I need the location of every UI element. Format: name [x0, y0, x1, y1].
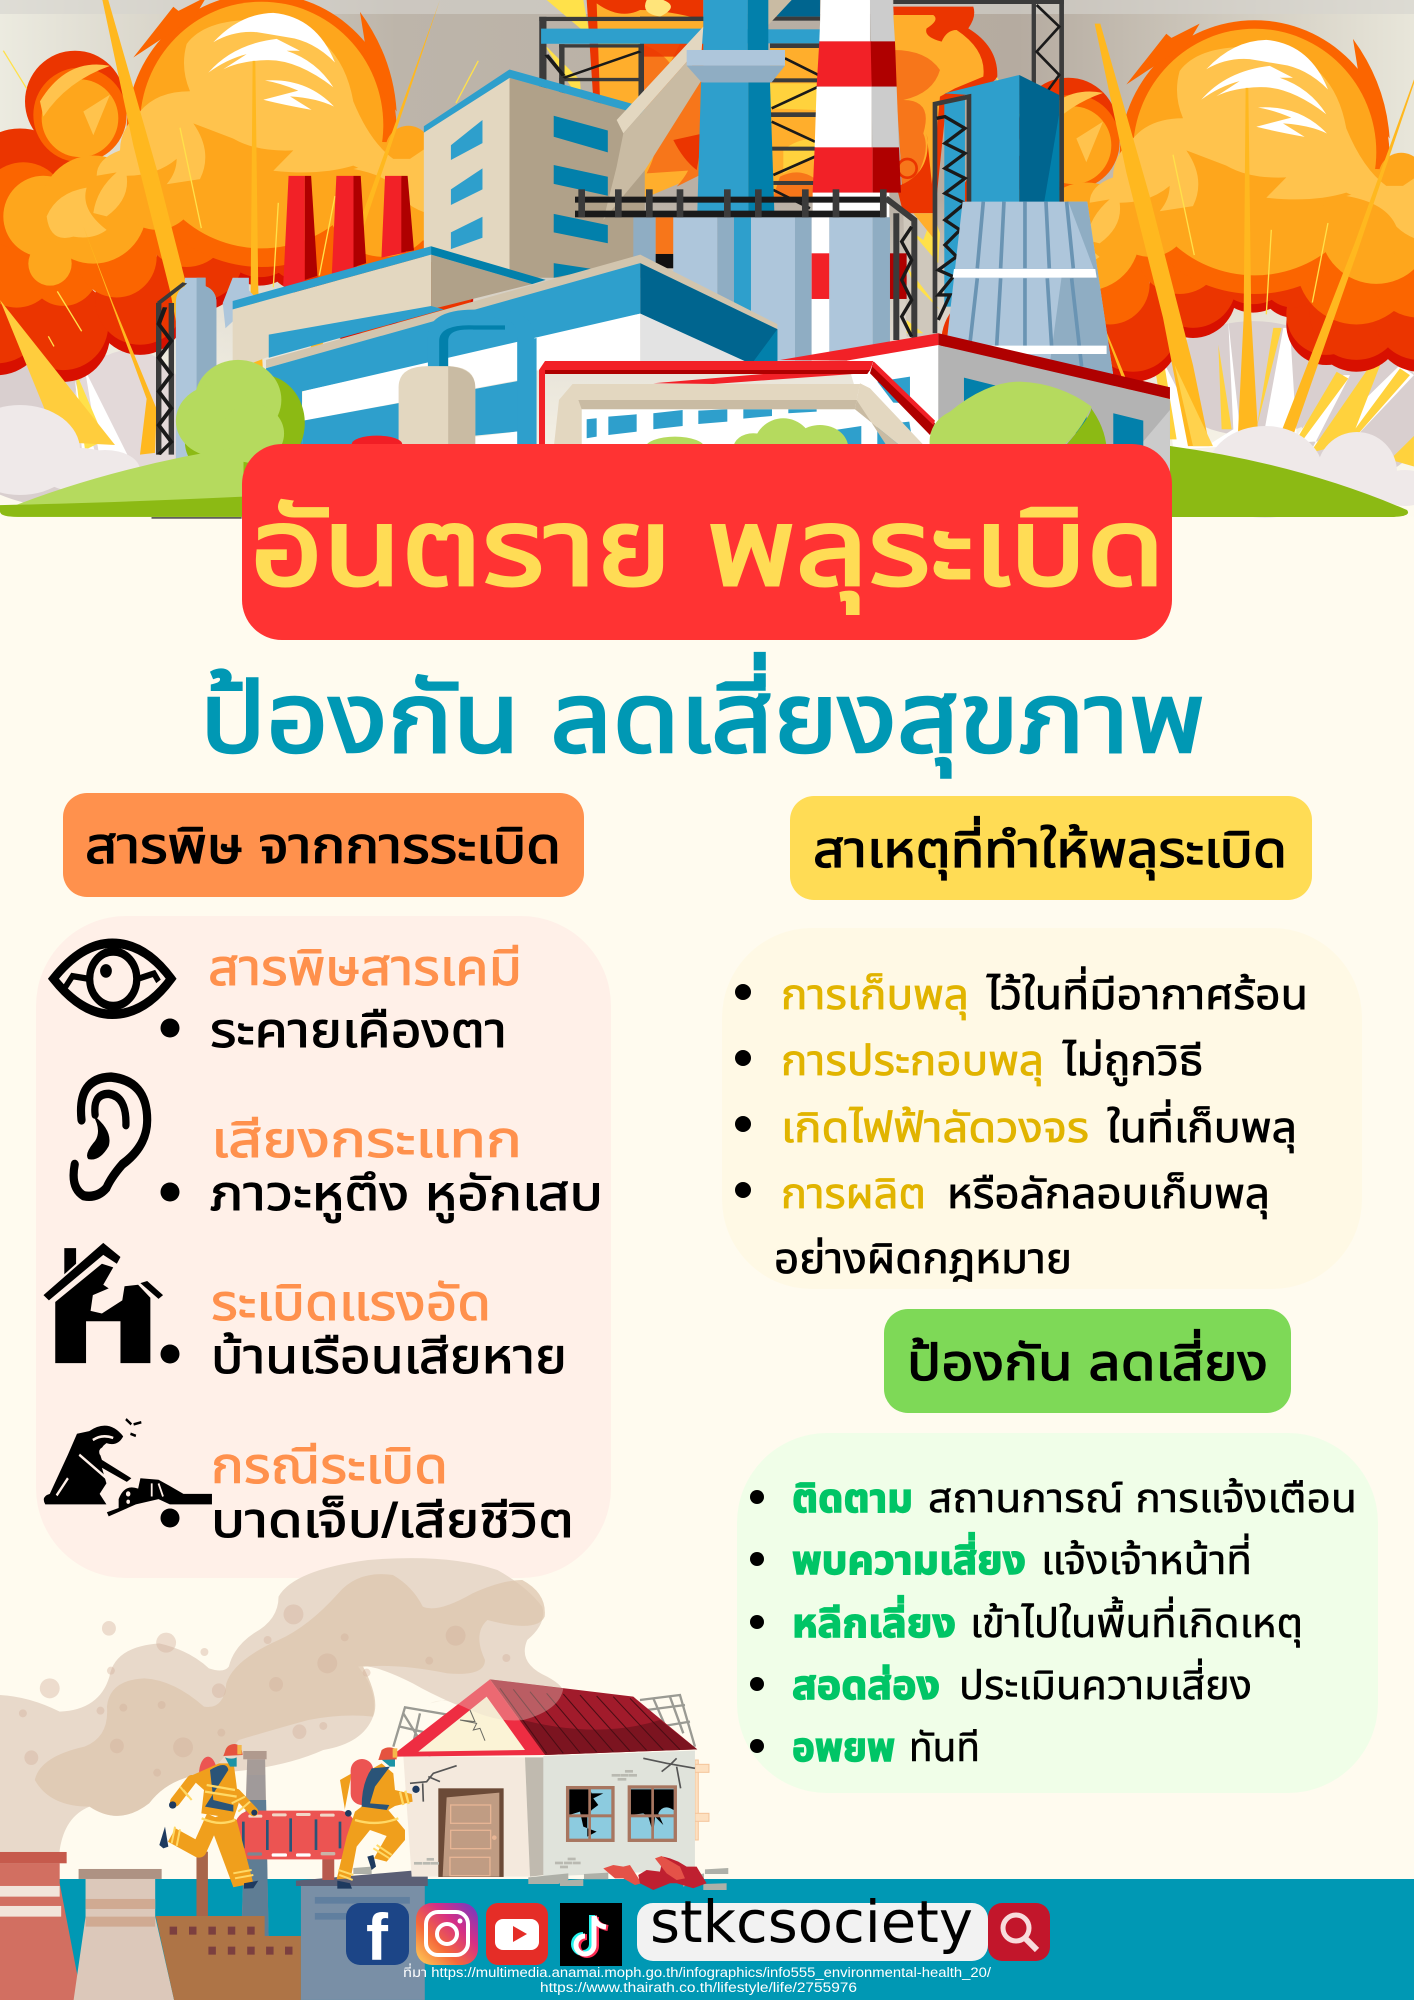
heading: prevention: ป้องกัน ลดเสี่ยง [907, 1329, 1268, 1391]
illustration: right front smoke [1207, 426, 1414, 518]
smoke cloud darker layer [35, 1574, 545, 1816]
list of causes: อย่างผิดกฎหมาย [774, 1235, 1072, 1282]
hill left shadow [0, 497, 243, 517]
roof lines [500, 1688, 680, 1753]
blue tower [687, 0, 785, 212]
courtyard bushes [645, 418, 848, 478]
illustration: damaged house [159, 1679, 728, 1890]
heading: prevention [884, 1309, 1291, 1413]
list of causes: เกิดไฟฟ้าลัดวงจร [781, 1104, 1089, 1151]
firefighter left [159, 1744, 258, 1889]
diagonal strut [603, 0, 792, 220]
storage tanks [176, 278, 257, 459]
list of prevention actions: ติดตาม [792, 1477, 913, 1521]
panel: chemical hazards [36, 793, 611, 1578]
item: blast: บ้านเรือนเสียหาย [211, 1331, 567, 1384]
scaffold right of chimney [886, 198, 914, 340]
list of causes [735, 966, 1308, 1282]
list of prevention actions: อพยพ [792, 1726, 895, 1770]
hill right [1170, 446, 1408, 517]
item: injury: กรณีระเบิด [211, 1438, 448, 1494]
icon: search button [988, 1903, 1050, 1961]
smoke overlay on roof [430, 1679, 563, 1721]
list of prevention actions: หลีกเลี่ยง [792, 1595, 956, 1646]
red and white chimney [813, 0, 901, 217]
firefighter right [337, 1747, 420, 1889]
item: injury: บาดเจ็บ/เสียชีวิต [211, 1495, 574, 1548]
icon: facebook [346, 1900, 409, 1974]
panel: causes [722, 796, 1362, 1289]
thin brown chimney [196, 1852, 208, 1917]
illustration: smoke, chimneys and footer band [0, 1558, 1414, 2000]
right wall [543, 1751, 695, 1877]
source text [403, 1963, 991, 1995]
sky background of explosion scene [0, 0, 1414, 520]
heading: hazards [63, 793, 584, 897]
right wing [780, 333, 1170, 520]
left factory buildings [0, 176, 777, 519]
beige chimney [74, 1869, 174, 2000]
item: chemicals [160, 940, 522, 1058]
icon: damaged house [43, 1243, 163, 1363]
door [438, 1788, 504, 1877]
list of causes: ในที่เก็บพลุ [1107, 1099, 1297, 1153]
windows [566, 1785, 677, 1842]
list of prevention actions [750, 1477, 1357, 1770]
beige tank [352, 366, 475, 452]
list of causes: ไม่ถูกวิธี [1062, 1037, 1203, 1086]
central fire and rear scaffolding [543, 0, 1064, 337]
list of causes: ไว้ในที่มีอากาศร้อน [986, 966, 1308, 1018]
title banner: อันตราย พลุระเบิด [250, 487, 1165, 613]
item: blast [160, 1275, 567, 1384]
icon: instagram [416, 1903, 478, 1965]
icon: eye [53, 943, 171, 1014]
list of prevention actions: สอดส่อง [792, 1663, 940, 1708]
item: blast: ระเบิดแรงอัด [211, 1275, 491, 1331]
tall beige building [424, 69, 645, 278]
icon: rescuer with victim [44, 1419, 212, 1516]
loose bricks [414, 1770, 637, 1868]
crack in gable [460, 1710, 485, 1741]
item: noise: ภาวะหูตึง หูอักเสบ [210, 1168, 603, 1223]
rubble [353, 1856, 728, 1890]
item: noise: เสียงกระแทก [211, 1112, 522, 1168]
beige frame [554, 383, 927, 448]
left rear scaffold [539, 17, 712, 126]
panel background [737, 1433, 1378, 1793]
pillar [525, 1757, 552, 1877]
smoke spots [19, 1604, 510, 1777]
red chimney left [0, 1852, 82, 2000]
red frame [539, 361, 935, 448]
subtitle: ป้องกัน ลดเสี่ยงสุขภาพ [200, 653, 1205, 778]
brown factory [156, 1916, 301, 2000]
list of prevention actions: ประเมินความเสี่ยง [959, 1658, 1252, 1708]
illustration: left ground smoke [0, 350, 195, 508]
source text: ที่มา https://multimedia.anamai.moph.go.th/infographics/info555_environmental-health_20/ [403, 1963, 991, 1980]
item: chemicals: ระคายเคืองตา [210, 1005, 507, 1058]
blue pipe arch [436, 314, 526, 446]
stretcher [235, 1811, 355, 1859]
heading: causes [790, 796, 1312, 900]
illustration: left front smoke and spike [0, 300, 140, 495]
bush right [930, 382, 1107, 448]
list of prevention actions: พบความเสี่ยง [792, 1532, 1026, 1583]
gray chimney [241, 1751, 269, 1937]
list of causes: การผลิต [781, 1170, 926, 1217]
footer band [0, 1879, 1414, 2000]
list of prevention actions: เข้าไปในพื้นที่เกิดเหตุ [970, 1596, 1303, 1647]
roof side [490, 1679, 697, 1755]
tower, chimney, silos, rail, cooling tower [575, 0, 1115, 387]
list of causes: การเก็บพลุ [781, 971, 969, 1020]
left scaffold [159, 283, 185, 455]
red roof building and courtyard [539, 333, 1170, 520]
illustration: right ground smoke and rays [1155, 321, 1414, 477]
panel background [722, 928, 1362, 1289]
left wall [403, 1756, 530, 1877]
icon: tiktok [560, 1903, 622, 1966]
panel: prevention [737, 1309, 1378, 1793]
source text: https://www.thairath.co.th/lifestyle/life/2755976 [540, 1980, 857, 1995]
wall cracks [410, 1758, 695, 1802]
list of causes: หรือลักลอบเก็บพลุ [947, 1170, 1270, 1219]
list of prevention actions: สถานการณ์ การแจ้งเตือน [928, 1477, 1357, 1521]
low beige building [233, 246, 546, 370]
icon: youtube [486, 1903, 548, 1965]
courtyard wall [582, 409, 927, 448]
hill left [0, 446, 243, 517]
title banner [242, 444, 1172, 640]
blue building right [935, 75, 1059, 333]
panel background [36, 916, 611, 1578]
scaffolds behind house [393, 1695, 695, 1757]
illustration: exploding factory [0, 0, 1408, 520]
tree left [176, 360, 305, 497]
smoke cloud [0, 1558, 565, 1878]
cooling tower [942, 202, 1115, 387]
gable [396, 1679, 545, 1757]
red chimneys [283, 176, 414, 286]
heading: hazards: สารพิษ จากการระเบิด [85, 818, 561, 874]
item: noise [160, 1112, 603, 1223]
side boards [695, 1760, 709, 1840]
illustration: right fireball [940, 20, 1414, 482]
list of prevention actions: แจ้งเจ้าหน้าที่ [1041, 1533, 1252, 1583]
silo columns [633, 217, 907, 361]
gray blue building [296, 1857, 428, 2000]
icon: facebook: f [366, 1900, 389, 1974]
search box: stkcsociety [650, 1888, 973, 1956]
big blue building [266, 255, 777, 446]
icon: ear [74, 1077, 147, 1196]
list of prevention actions: ทันที [909, 1726, 980, 1770]
list of causes: การประกอบพลุ [781, 1037, 1044, 1086]
item: chemicals: สารพิษสารเคมี [208, 940, 522, 996]
heading: causes: สาเหตุที่ทำให้พลุระเบิด [813, 816, 1287, 880]
item: injury [160, 1438, 574, 1548]
illustration: left fireball [0, 0, 480, 455]
railing [575, 189, 887, 217]
